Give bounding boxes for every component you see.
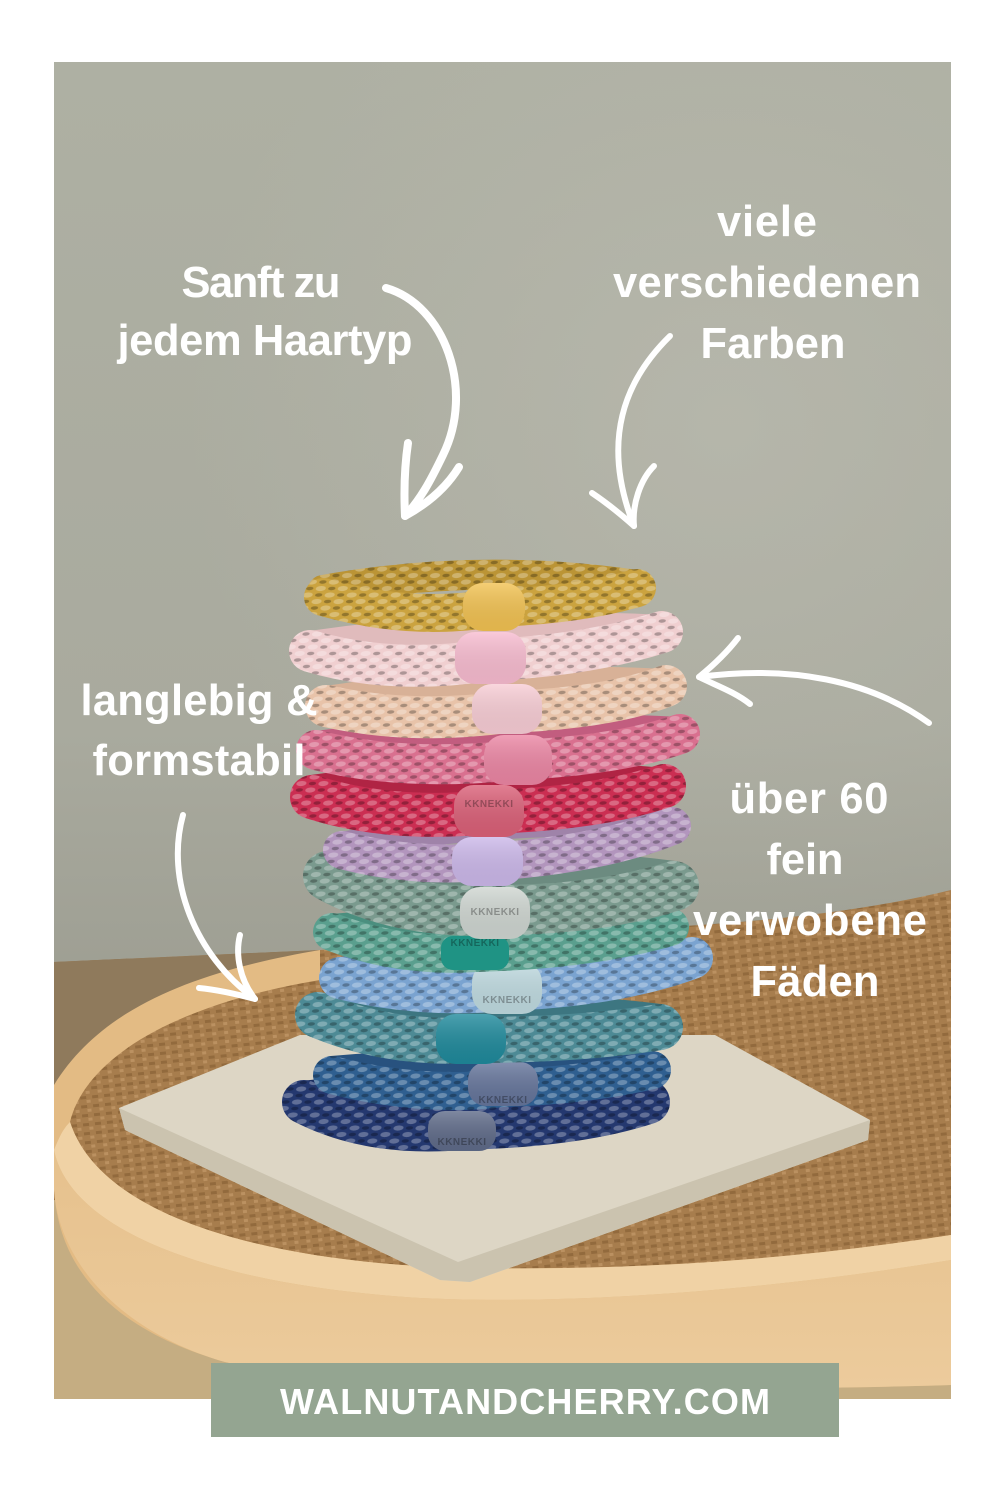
band: mustard	[323, 575, 637, 631]
band: teal	[318, 1008, 660, 1064]
band: green teal	[332, 919, 670, 970]
band: lilac	[342, 823, 672, 886]
band: peach	[326, 682, 666, 734]
tray outer body	[54, 950, 951, 1389]
label: many different colours: Farben	[700, 320, 846, 368]
band: navy: KKNEKKI	[437, 1137, 487, 1148]
label: over 60 finely woven threads	[693, 775, 927, 1006]
footer banner	[211, 1363, 839, 1437]
label: gentle on every hair type	[116, 259, 412, 365]
footer banner: WALNUTANDCHERRY.COM	[280, 1381, 770, 1422]
round wooden tray	[54, 950, 951, 1389]
arrow: from durable label to stack	[178, 815, 255, 999]
label: over 60 finely woven threads: fein	[766, 836, 844, 884]
tray front face	[54, 1150, 951, 1389]
label: durable and shape-retaining	[80, 677, 318, 785]
band: blue: KKNEKKI	[478, 1095, 528, 1106]
tray inner floor	[70, 980, 951, 1268]
tray rim top	[54, 1122, 951, 1300]
label: many different colours: verschiedenen	[613, 259, 921, 307]
band: rose	[316, 729, 680, 785]
band: blue	[332, 1062, 652, 1106]
stone tile	[119, 1035, 870, 1282]
label: many different colours: viele	[717, 198, 817, 246]
band: light blue: KKNEKKI	[482, 995, 532, 1006]
woven mat under tray	[54, 1200, 951, 1399]
hair ties stack	[302, 575, 692, 1151]
arrow: from colours label to stack	[592, 336, 670, 526]
label: durable and shape-retaining: formstabil	[92, 737, 306, 785]
label: gentle on every hair type: jedem Haartyp	[116, 317, 412, 365]
band: sage	[328, 867, 674, 939]
arrow: from gentle label to stack	[386, 288, 459, 516]
band: green teal: KKNEKKI	[450, 938, 500, 949]
table surface	[54, 890, 951, 1399]
band: navy	[302, 1089, 650, 1151]
band: crimson	[312, 778, 664, 837]
band: crimson: KKNEKKI	[464, 799, 514, 810]
band: pink	[310, 627, 662, 684]
label: gentle on every hair type: Sanft zu	[182, 259, 340, 307]
arrow: from threads label to stack	[699, 638, 929, 723]
label: over 60 finely woven threads: über 60	[730, 775, 888, 823]
label: over 60 finely woven threads: Fäden	[750, 958, 880, 1006]
panel: photo background	[54, 62, 951, 1399]
band: sage: KKNEKKI	[470, 907, 520, 918]
label: many different colours	[613, 198, 921, 368]
label: durable and shape-retaining: langlebig &	[80, 677, 318, 725]
band: light blue	[340, 955, 692, 1014]
label: over 60 finely woven threads: verwobene	[693, 897, 927, 945]
